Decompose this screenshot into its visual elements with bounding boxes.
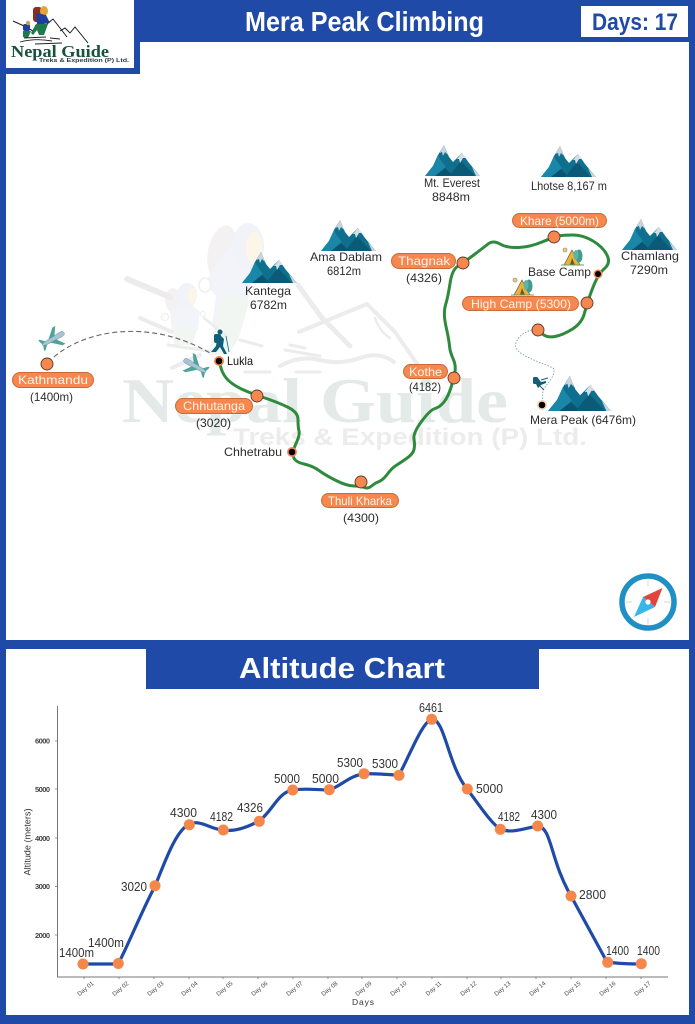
logo: climbers — [13, 6, 62, 44]
stop: High Camp: High Camp (5300) — [471, 297, 571, 311]
icon: compass — [622, 576, 674, 628]
logo: tagline: Treks & Expedition (P) Ltd. — [39, 58, 130, 64]
line chart: altitude by day — [22, 701, 668, 1007]
x-axis day labels: Day 09 — [355, 981, 374, 998]
label: Lhotse height: Lhotse 8,167 m — [531, 179, 607, 193]
data value labels — [59, 701, 660, 960]
watermark: company name: Nepal Guide — [122, 365, 508, 436]
chart axes — [55, 706, 668, 979]
data value labels: 5000 — [274, 772, 300, 786]
y-axis tick labels: 2000 — [35, 931, 50, 940]
stop: Lukla: Lukla — [227, 354, 253, 368]
logo panel — [0, 0, 140, 74]
icon: climber on Mera Peak — [533, 377, 548, 390]
x-axis day labels: Day 10 — [390, 981, 409, 998]
chart heading bar — [146, 649, 539, 689]
data value labels: 4300 — [170, 806, 197, 820]
y-axis tick labels — [35, 736, 50, 940]
label: Mt. Everest height: Mt. Everest — [424, 176, 481, 190]
mountain: Mera Peak — [530, 376, 636, 427]
x-axis day labels: Day 14 — [529, 981, 548, 998]
data value labels: 6461 — [419, 701, 443, 715]
panel: altitude chart — [6, 649, 689, 1015]
stop: Thagnak: Thagnak — [398, 254, 451, 268]
y-axis tick labels: 4000 — [35, 834, 50, 843]
label: Mt. Everest height: 8848m — [432, 190, 470, 204]
stop: Chhutanga: Chhutanga — [183, 399, 245, 413]
x-axis day labels: Day 17 — [634, 981, 653, 998]
label: Chamlang height — [621, 249, 679, 277]
mountain: Ama Dablam — [310, 220, 382, 278]
stop: Chhetrabu: Chhetrabu — [224, 445, 282, 459]
x-axis day labels: Day 12 — [460, 981, 479, 998]
x-axis day labels: Day 06 — [251, 981, 270, 998]
data value labels: 4182 — [498, 810, 520, 824]
data value labels: 1400m — [59, 946, 94, 960]
watermark: company tagline: Treks & Expedition (P) Ltd. — [233, 424, 587, 451]
label: Mt. Everest height — [424, 176, 481, 204]
stop: Kathmandu: (1400m) — [30, 390, 73, 404]
label: Chamlang height: 7290m — [630, 263, 668, 277]
stop: Thagnak — [392, 254, 469, 285]
stop: Kathmandu: Kathmandu — [18, 373, 88, 387]
watermark: small hiker — [162, 283, 206, 345]
mountain: Mt. Everest — [424, 145, 481, 204]
y-axis tick labels: 5000 — [35, 785, 50, 794]
stop: Base Camp: Base Camp — [528, 265, 591, 279]
data value labels: 5000 — [312, 772, 339, 786]
logo: company name: Nepal Guide — [11, 42, 109, 61]
label: Kantega height: Kantega — [245, 284, 291, 298]
title: Mera Peak Climbing — [245, 6, 484, 37]
x-axis day labels: Day 07 — [286, 981, 305, 998]
x-axis day labels: Day 04 — [181, 981, 200, 998]
data value labels: 5300 — [372, 757, 398, 771]
stop: Kothe: Kothe — [409, 365, 442, 379]
stop: Kathmandu — [12, 358, 94, 404]
icon: Base Camp tent — [561, 248, 584, 265]
watermark: company logo — [122, 223, 587, 451]
x-axis day labels: Day 13 — [494, 981, 513, 998]
x-axis day labels: Day 02 — [112, 981, 131, 998]
watermark: large hiker — [199, 223, 264, 355]
x-axis day labels: Day 15 — [564, 981, 583, 998]
data value labels: 1400 — [637, 944, 660, 958]
x-axis day labels: Day 11 — [425, 981, 444, 997]
data value labels: 1400m — [88, 936, 124, 950]
x-axis day labels: Day 16 — [599, 981, 618, 998]
watermark: mountain and snow lines — [127, 279, 420, 372]
data value labels: 4300 — [531, 808, 557, 822]
icon: hiker at Lukla — [211, 330, 229, 354]
x-axis day labels: Day 08 — [321, 981, 340, 998]
stop: Mera Peak summit — [537, 400, 547, 410]
x-axis day labels: Day 05 — [216, 981, 235, 998]
x-axis day labels: Day 03 — [147, 981, 166, 998]
icon: High Camp tent — [511, 278, 534, 295]
mountain: Chamlang — [621, 219, 679, 277]
stop: Chhutanga — [176, 390, 263, 430]
y-axis tick labels: 3000 — [35, 882, 50, 891]
icon: plane arriving at Lukla — [179, 351, 212, 382]
stop: Kothe — [404, 364, 460, 394]
data points — [78, 714, 647, 970]
x-axis title: Days — [352, 997, 374, 1007]
mountain: Kantega — [242, 252, 297, 312]
data value labels: 2800 — [579, 888, 606, 902]
data value labels: 5300 — [337, 756, 363, 770]
stop: Kothe: (4182) — [409, 380, 441, 394]
label: Mera Peak height: Mera Peak (6476m) — [530, 413, 636, 427]
stop: Thuli Kharka: Thuli Kharka — [328, 494, 392, 508]
y-axis tick labels: 6000 — [35, 736, 50, 746]
icon: plane departing Kathmandu — [36, 324, 69, 355]
label: Ama Dablam height: 6812m — [327, 264, 361, 278]
stop: Thuli Kharka — [322, 476, 398, 525]
label: Chamlang height: Chamlang — [621, 249, 679, 263]
data value labels: 4182 — [210, 810, 233, 824]
logo: mountain outline — [47, 19, 88, 43]
label: Ama Dablam height: Ama Dablam — [310, 250, 382, 264]
trekking route — [219, 235, 609, 488]
mountain: Lhotse — [531, 146, 607, 193]
altitude curve — [83, 719, 641, 964]
stop: Khare: Khare (5000m) — [520, 214, 599, 228]
days badge: Days: 17 — [592, 9, 678, 36]
x-axis day labels: Day 01 — [77, 981, 96, 998]
label: Ama Dablam height — [310, 250, 382, 278]
climbing route: dotted to Mera Peak — [516, 330, 554, 405]
stop: Thagnak: (4326) — [406, 271, 442, 285]
panel: route map — [6, 42, 689, 640]
label: Kantega height: 6782m — [250, 298, 287, 312]
stop: Lukla — [214, 354, 253, 368]
chart heading bar: Altitude Chart — [239, 653, 445, 685]
stop: Thuli Kharka: (4300) — [343, 511, 379, 525]
label: Kantega height — [245, 284, 291, 312]
data value labels: 5000 — [476, 782, 503, 796]
y-axis title: Altitude (meters) — [22, 808, 34, 876]
x-axis day labels — [77, 981, 653, 998]
flight path: Kathmandu to Lukla — [54, 331, 210, 357]
data value labels: 3020 — [121, 880, 147, 894]
data value labels: 4326 — [237, 801, 263, 815]
data value labels: 1400 — [606, 944, 629, 958]
stop: Chhutanga: (3020) — [196, 416, 231, 430]
stop: route end below High Camp — [532, 324, 544, 336]
stop: Khare — [512, 214, 606, 243]
